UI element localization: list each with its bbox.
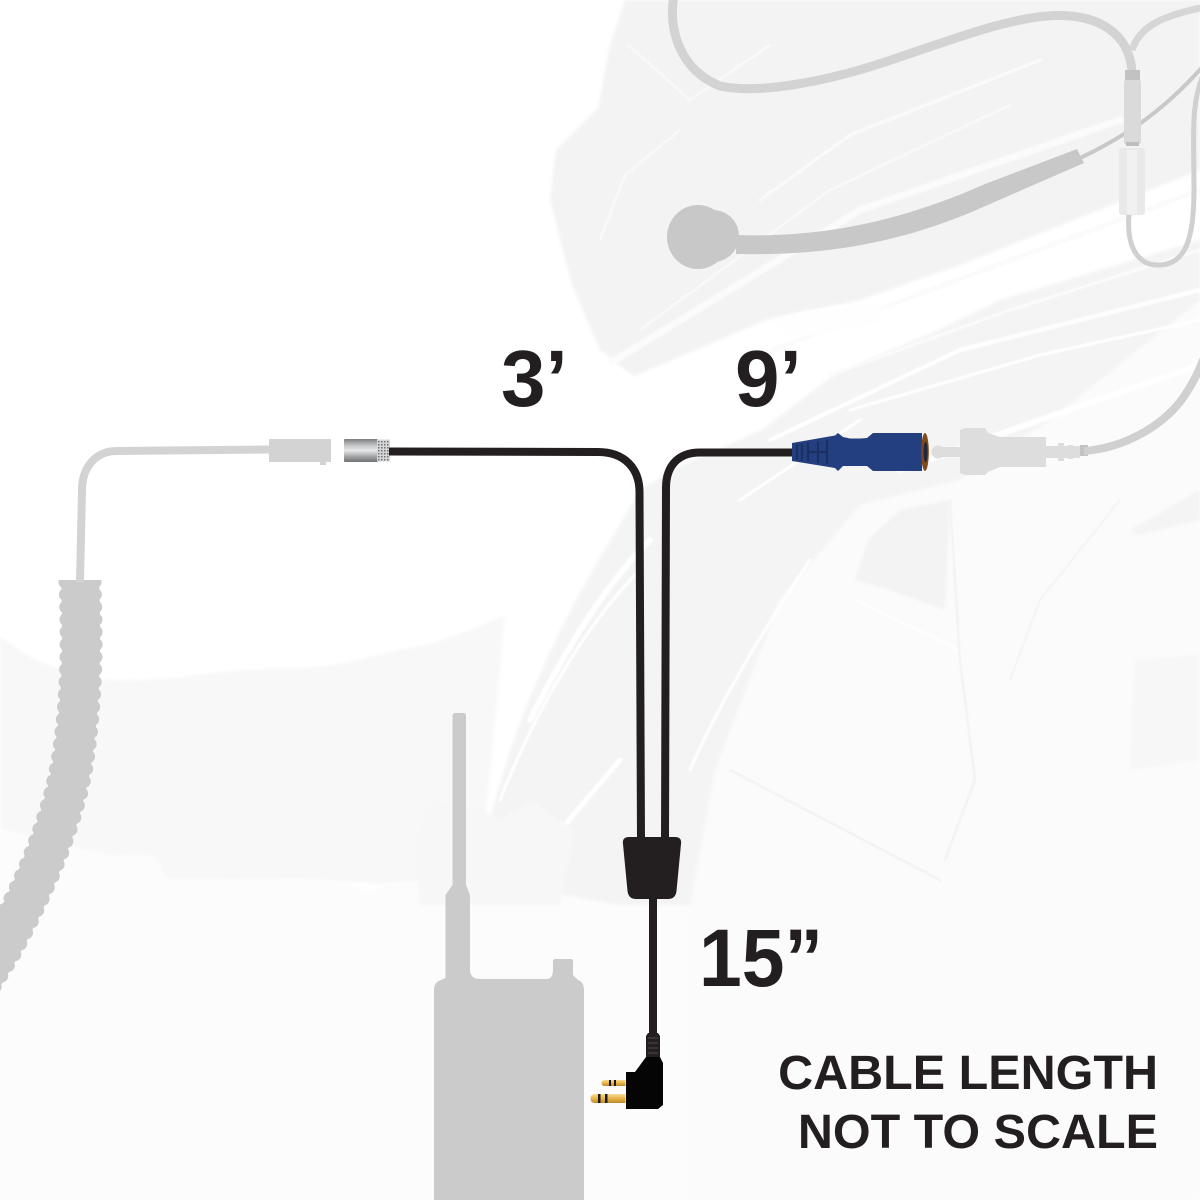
ghost headset: thin boom wire — [1078, 64, 1200, 159]
note: cable length not to scale: NOT TO SCALE — [798, 1105, 1158, 1159]
silver knurled connector — [344, 439, 390, 462]
ghost headset: microphone foam — [667, 205, 739, 269]
plug body — [626, 1057, 663, 1109]
ghost cable to coil — [80, 450, 270, 582]
ghost coiled cable — [0, 575, 96, 1003]
ghost headset: upper connector — [1124, 70, 1141, 146]
background: shoulder patch right — [1130, 655, 1200, 770]
ghost connector right — [932, 428, 1088, 475]
background: gap under helmet — [774, 303, 882, 336]
background: right torso base — [672, 240, 1200, 1200]
lower gold pin — [590, 1094, 626, 1103]
ghost headset: loop cable — [1129, 70, 1200, 265]
label: 15 inch: 15” — [699, 913, 823, 1004]
background: lower left arm — [0, 830, 700, 1200]
background: top right badge — [1130, 490, 1200, 535]
ghost connector left — [269, 439, 331, 465]
plug ribs — [648, 1038, 658, 1053]
label: 9 foot: 9’ — [735, 334, 802, 423]
blue connector ribs — [797, 440, 827, 464]
background: helmet highlights — [600, 45, 1200, 375]
background: shoulder strip — [660, 240, 1200, 905]
background: chest fold lines — [730, 500, 1120, 880]
background: torso folds — [500, 540, 960, 860]
ghost cable right — [1084, 355, 1200, 451]
note: cable length not to scale: CABLE LENGTH — [778, 1046, 1158, 1100]
label: 3 foot: 3’ — [501, 334, 568, 423]
plug strain relief — [646, 1033, 660, 1060]
blue connector — [792, 433, 929, 471]
ghost headset: microphone boom — [736, 149, 1084, 254]
background: jacket centre — [480, 470, 700, 905]
blue connector socket — [924, 442, 928, 462]
background: glove at radio — [415, 800, 575, 905]
upper gold pin — [602, 1080, 626, 1086]
ghost headset: top cable — [673, 0, 1132, 89]
black cable: 9 foot run — [665, 452, 795, 840]
black cable: 3 foot run — [389, 452, 641, 840]
background: lower left sleeve — [0, 616, 505, 885]
blue connector end — [921, 433, 929, 471]
black Y junction — [623, 837, 681, 899]
background: jacket badge — [855, 500, 950, 610]
ghost radio — [434, 713, 584, 1200]
note: cable length not to scale — [778, 1046, 1158, 1159]
radio plug — [590, 1033, 663, 1109]
background: streaks across shoulder — [740, 290, 1200, 500]
black cable: 15 inch run — [649, 898, 657, 1035]
ghost headset: lower connector — [1119, 148, 1145, 215]
background: helmet — [550, 0, 1200, 376]
ghost headset: second cable — [1132, 7, 1200, 50]
